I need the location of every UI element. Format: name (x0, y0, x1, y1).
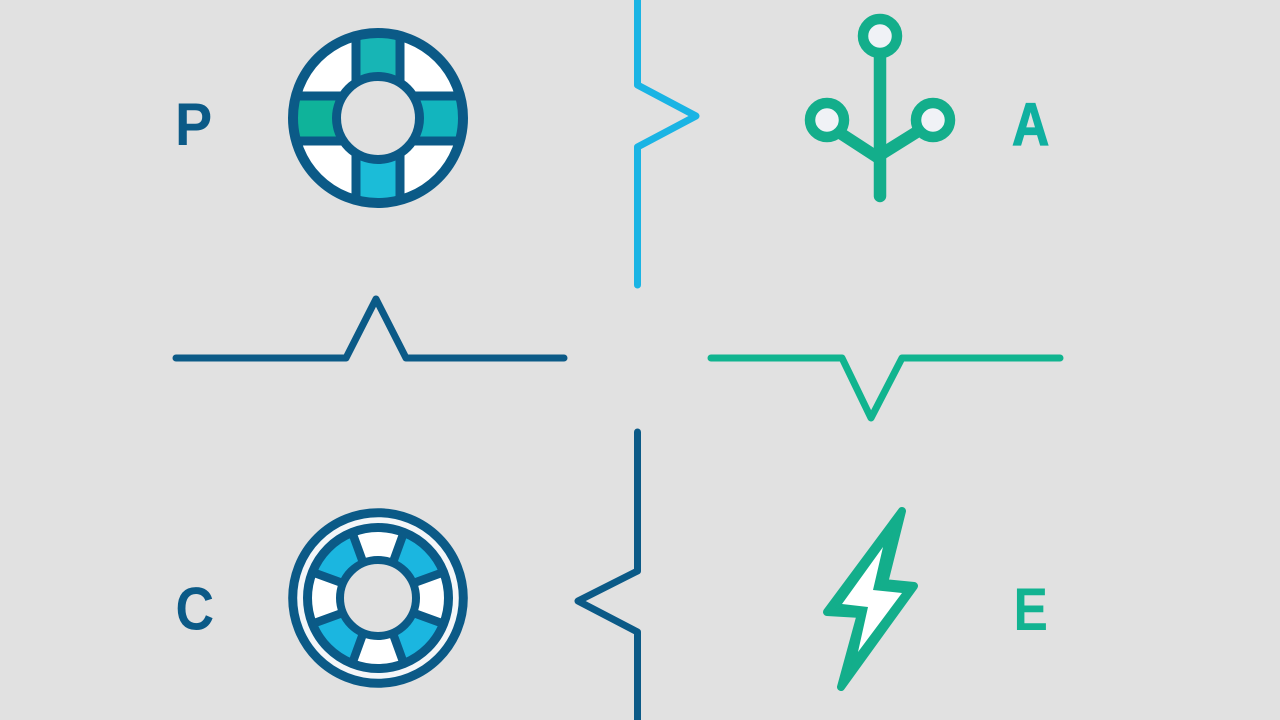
bracket: bottom dark-blue with left notch (578, 432, 638, 720)
icon: life ring, top left (290, 30, 468, 206)
letter A: A (1012, 90, 1049, 158)
letter E: E (1014, 575, 1048, 643)
icon: lightning bolt (827, 511, 914, 687)
divider: right green with downward notch (711, 358, 1060, 418)
divider: left dark-blue with upward peak (176, 299, 564, 358)
icon: branching node tree (810, 19, 950, 196)
letter C: C (176, 577, 214, 643)
infographic canvas (172, 0, 1064, 720)
icon: double-ring life ring, bottom left (290, 513, 470, 683)
letter P: P (175, 92, 212, 158)
bracket: top light-blue with right notch (638, 0, 696, 285)
